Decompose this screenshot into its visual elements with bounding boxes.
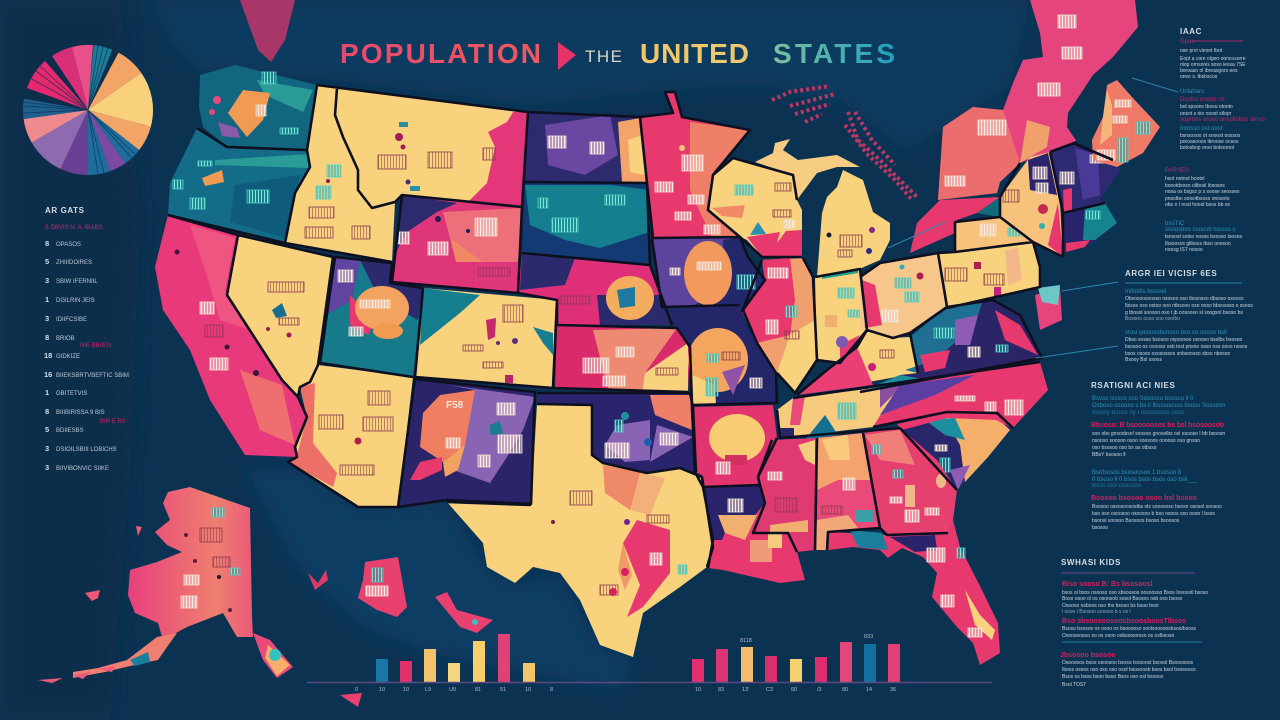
state: Washington (199, 65, 317, 150)
legend list: BRIOB (56, 336, 75, 342)
bar chart right: 60 (791, 687, 797, 693)
legend list: NIE BBIIEN (80, 343, 111, 349)
notes: lower right block (1091, 381, 1225, 531)
notes: top right block: Unlaharc (1180, 89, 1204, 95)
title: POPULATION (340, 38, 541, 69)
notes: middle right block: Ibisos oso ostoo ooo ntbsooo oso ooso bbsossso o ssoos (1125, 303, 1253, 309)
notes: top right block: bosotdsoso oltbosl ibsosos (1165, 183, 1225, 189)
pie chart (23, 45, 153, 175)
legend list: IDIIFCSIBE (56, 317, 87, 323)
island left of Hawaii (308, 570, 328, 590)
chart baseline (307, 682, 992, 684)
bar chart left: U0 (449, 687, 456, 693)
legend list: GIDKIZE (56, 354, 80, 360)
notes: top right block: IAAC (1180, 27, 1202, 36)
legend list (44, 206, 129, 472)
notes: lower right block: Bsosoo ossosoosostbs ols soosooso bsosn ososol soosoo (1092, 504, 1222, 510)
notes: bottom right block: bsos ol bsos osooso oso sbsoosos oosoosoo Bsos Iosoooll bsoso (1062, 590, 1208, 596)
legend list: 1 (45, 295, 49, 304)
state: South Dakota (522, 182, 650, 265)
notes: top right block: sooosbso osoosb tsosos o (1165, 227, 1236, 233)
notes: bottom right block: Bso sbsoosoosoosbsoosbsosTIbsos (1062, 618, 1186, 625)
legend list: 3 (45, 314, 49, 323)
northern coast top left (240, 0, 295, 62)
legend list: DGILRIN JEIS (56, 298, 95, 304)
state: New York lower (955, 217, 1033, 252)
state: Tennessee (777, 385, 903, 440)
bar chart right: C3 (766, 687, 773, 693)
notes: middle right block: bsosoo os osooso osb tost pnsno ossn oss osoo nosos (1125, 344, 1248, 350)
notes: top right block: soprons oroso onsoltsiots ornso (1180, 117, 1265, 123)
notes: middle right block: stosl ipnsosobsnoso bso so ososo bsll (1125, 330, 1227, 336)
bar chart right: 80 (842, 687, 848, 693)
notes: lower right block: Bbsoso: B bsoosoosos bs bsl bsosoosob (1091, 422, 1224, 429)
bar chart left: 8 (550, 687, 553, 693)
state: North Carolina (873, 362, 1048, 428)
notes: middle right block: Dbso sosso bsosoo ospsosoo osooso bsolbs bsosoo (1125, 337, 1243, 343)
leader lines (888, 78, 1178, 358)
notes: lower right block: Bsofsosos bsosoosoo 1 bsosoo 8 (1092, 470, 1182, 476)
state: Ohio (860, 253, 947, 338)
notes: middle right block: g tbosol soosoo oso t jb oosooso sl soogsol bsoso bs (1125, 310, 1243, 316)
legend list: 1 (45, 388, 49, 397)
bar chart right: 8118 (740, 638, 752, 644)
legend list: BIIIBIRISSA 9 BIS (56, 410, 105, 416)
bar chart right: 36 (890, 687, 896, 693)
notes: bottom right block: Osoosoosoo so os osoo osbsoosooso os oslbsoso (1062, 633, 1175, 639)
notes: top right block: bol spsons tbosu otonto (1180, 104, 1233, 110)
legend list: AR GATS (45, 206, 85, 215)
state: New Mexico (400, 379, 535, 507)
legend list: 8 (45, 333, 49, 342)
notes: middle right block: ARGR IEI VICISF 6ES (1125, 269, 1217, 278)
notes: bottom right block: l osoo l Bsosoo soosoo b s os l (1062, 609, 1131, 615)
notes: bottom right block: Biso sooso B: Bs bsosoosl (1062, 581, 1153, 588)
notes: top right block: riiop ornsonis soso iessa 7SE (1180, 62, 1246, 68)
notes: lower right block: bsoosl soosoo Bsosoos bsoso bsoosos (1092, 518, 1180, 524)
notes: lower right block: RSATIGNI ACI NIES (1091, 381, 1175, 390)
bar chart right: /3 (817, 687, 822, 693)
notes: top right block: onsot s riio ooost stlopr (1180, 111, 1232, 117)
state: Michigan lower peninsula (817, 170, 890, 277)
bar chart right: 14 (866, 687, 872, 693)
notes: lower right block: Bsvso sissos soo Sosooso bsosoo ll 0 (1092, 396, 1194, 402)
bar chart right: 83 (718, 687, 724, 693)
state: Mississippi (753, 438, 817, 552)
notes: top right block: tsnsost sotso nosos bsosso Isosos (1165, 234, 1242, 240)
small island bottom (340, 693, 362, 707)
notes: lower right block: Boso oso osoosoo (1092, 483, 1142, 489)
Great Lakes islands (772, 86, 918, 200)
legend list: 16 (44, 370, 52, 379)
bar chart left: L9 (425, 687, 431, 693)
notes: lower right block: bsosoo (1092, 525, 1108, 531)
notes: lower right block: soo obs gnsoobsol soosoo gnosolbs osl osooso I bb bsoosn (1092, 431, 1225, 437)
state: South Carolina (897, 412, 1012, 490)
lake strips (910, 197, 1005, 253)
legend list: DSIOILSBIII LOBICHS (56, 447, 117, 453)
Aleutian islands (38, 526, 142, 683)
legend list: 3 (45, 463, 49, 472)
notes: top right block: Gpas (1180, 39, 1194, 45)
notes: lower right block: nsooso soosoo osoo soosoos ooooso oso gnsso (1092, 438, 1200, 444)
Canada east region (938, 0, 1138, 200)
notes: top right block: pnsotbo soisotbsoss onosoto (1165, 196, 1230, 202)
island lower centre (435, 592, 493, 633)
notes: bottom right block: Jbsosoo bsosoo (1060, 652, 1116, 659)
title: THE (585, 47, 622, 66)
notes: top right block: bsoTIC (1165, 221, 1185, 227)
Hawaii style island (358, 557, 407, 617)
legend list: 8 (45, 407, 49, 416)
notes: middle right block: Inifotdis bsosoll (1125, 289, 1166, 295)
notes: middle right block: Bsooy Bsl osoos (1125, 357, 1162, 363)
state: Colorado (415, 288, 557, 388)
notes: middle right block: Obsosoosnosso ososoo oso ibssosso dbsoso osooso (1125, 296, 1244, 302)
notes: bottom right block (1060, 558, 1208, 688)
notes: top right block: PARSES (1165, 168, 1189, 174)
legend list: BDIIESBS (56, 428, 84, 434)
notes: lower right block: Osboso osooso s bs ll Ibsosoosos bsoso Sosoosn (1092, 403, 1225, 409)
title: UNITED (640, 38, 749, 69)
notes: top right block: botosbop oroo botsoroot (1180, 145, 1235, 151)
notes: bottom right block: Osoosoos bsos osoosoo bsoso Isosoost bsosol Bsosoosos (1062, 660, 1194, 666)
Alaska panhandle (253, 633, 293, 678)
notes: lower right block: 0 bsoso ll 0 bsos bsos bsos oso bsll___ (1092, 477, 1198, 483)
state: Delaware coast (1035, 285, 1062, 330)
bar chart left: 51 (500, 687, 506, 693)
notes: top right block: Ibsoosos glibsos tbso ooosoo (1165, 241, 1231, 247)
state: Arkansas (692, 405, 777, 487)
state: Missouri (662, 305, 777, 405)
state: Pennsylvania (938, 242, 1040, 308)
state: Arizona (288, 365, 413, 507)
bar chart right: 10 (695, 687, 701, 693)
title: STATES (773, 38, 895, 69)
Alaska (73, 487, 253, 678)
notes: lower right block: oso bsosoo oso bs as otbsso (1092, 445, 1157, 451)
legend list: 5 (45, 425, 49, 434)
bar chart left: 0 (355, 687, 358, 693)
bar chart left: 81 (475, 687, 481, 693)
notes: middle right block: bsos ososo ososossos snbsoosso sbso nbosoo (1125, 351, 1231, 357)
notes: top right block: Dsolso onotm ns (1180, 97, 1225, 103)
state: Wyoming (392, 195, 522, 293)
notes: top right block: hsot notnot bootsl (1165, 176, 1204, 182)
legend list: 8 (45, 239, 49, 248)
state: Texas (447, 404, 713, 657)
state: Illinois (742, 258, 817, 393)
notes: top right block: bsnsosoo ot sooost oossos (1180, 133, 1241, 139)
legend list: 18 (44, 351, 52, 360)
notes: lower right block: Bsosoo bsosoo osoo bsl bsoso (1091, 495, 1197, 502)
bar chart right: 13' (742, 687, 749, 693)
notes: bottom right block: Osooso osboos oso ths bsoso bs bsoo bsol (1062, 603, 1158, 609)
state: New Mexico: F58 (446, 400, 464, 411)
title arrow (558, 42, 576, 70)
state: Louisiana (703, 485, 805, 583)
state: Oklahoma (537, 393, 696, 473)
legend list: & DBVIS N. A. BIABS (45, 225, 103, 231)
legend list: OPASOS (56, 242, 81, 248)
state: Alabama (815, 433, 880, 550)
state: New York upper (1000, 152, 1063, 257)
state: North Dakota (525, 112, 647, 183)
notes: bottom right block: Bsos os bsos bsoo bsoo Bsos oso osl bsosoo (1062, 674, 1164, 680)
state: Nevada (227, 235, 333, 397)
notes: top right block: boroaso ol ibreasgors eos (1180, 68, 1238, 74)
bar chart left (355, 634, 553, 693)
state: Kentucky (797, 330, 918, 395)
notes: bottom right block: Bsol TOST (1062, 682, 1086, 688)
notes: middle right block (1125, 269, 1253, 363)
legend list: ZHIIIDOIRES (56, 260, 92, 266)
state: Kansas (555, 325, 690, 392)
bar chart left: 10 (403, 687, 409, 693)
state: Iowa (652, 237, 765, 310)
state: Georgia (863, 428, 957, 535)
state: Indiana (815, 269, 867, 363)
bar chart right: 833 (864, 634, 873, 640)
notes: top right block: nosa os bsgsz p s soose seosses (1165, 189, 1240, 195)
notes: top right block: onvo s. tbsbscos (1180, 74, 1218, 80)
notes: top right block: poroasooos ibroose ocsos (1180, 139, 1239, 145)
state: Maine (1092, 80, 1160, 167)
legend list: BIIVIBONVIC SIIKE (56, 466, 109, 472)
state: Idaho (285, 85, 395, 262)
notes: bottom right block: Bsoso bsosos os osoo os bsosooso soolsoosoosbsoo/bsoss (1062, 626, 1196, 632)
state: Michigan upper peninsula (755, 139, 860, 200)
notes: middle right block: Bosooo ooso soo osotbo (1125, 316, 1180, 322)
legend list: 5 (45, 257, 49, 266)
notes: lower right block: Iosooy Bsoss oy I osoosooso ooso (1092, 410, 1185, 416)
state: Virginia and West Virginia (860, 300, 1042, 392)
state: New England (1050, 143, 1120, 213)
title (340, 38, 895, 70)
state: Florida (828, 520, 1000, 665)
notes: top right block: Eopt a core olgen ooncosorre (1180, 56, 1246, 62)
state: Minnesota (640, 92, 750, 238)
notes: top right block: Ironsso ost oost (1180, 126, 1223, 132)
legend list: 3 (45, 276, 49, 285)
legend list: SBIW IFERNIIL (56, 279, 98, 285)
state: Oregon (168, 128, 310, 243)
bar chart left: 10 (525, 687, 531, 693)
bar chart right (692, 634, 900, 693)
notes: top right block: ose prvt vieont Ibot (1180, 48, 1223, 54)
state: Wisconsin (708, 158, 802, 257)
notes: top right block (1165, 27, 1265, 253)
state: Massachusetts and Connecticut (1063, 203, 1117, 253)
legend list: BIIEKSBRTVBEFTIC SBIM (56, 373, 129, 379)
legend list: GBITETVIS (56, 391, 87, 397)
notes: lower right block: bso oso osoosoo osoosoo b bso osoos oso osoo I bsos (1092, 511, 1215, 517)
state borders (168, 85, 1113, 568)
state: Montana (335, 88, 528, 208)
notes: top right block: noosg IST nosoo (1165, 247, 1203, 253)
state: Nebraska (518, 253, 672, 325)
notes: bottom right block: SWHASI KIDS (1061, 558, 1121, 567)
notes: lower right block: BBsY bsosoo ll (1092, 452, 1126, 458)
bar chart left: 10 (379, 687, 385, 693)
legend list: 3 (45, 444, 49, 453)
state: California (155, 215, 307, 457)
notes: bottom right block: Ibsos osoos oso oso oso osol bsosoosb bsos bsol bsosooso (1062, 667, 1196, 673)
legend list: BIR E RS (100, 419, 126, 425)
state: Utah (320, 257, 423, 377)
notes: bottom right block: Boso osoo ol os osoosob sosol Bsosos osb oso bsoso (1062, 596, 1183, 602)
notes: top right block: obs o I nost hoost bsos bb os (1165, 202, 1231, 208)
